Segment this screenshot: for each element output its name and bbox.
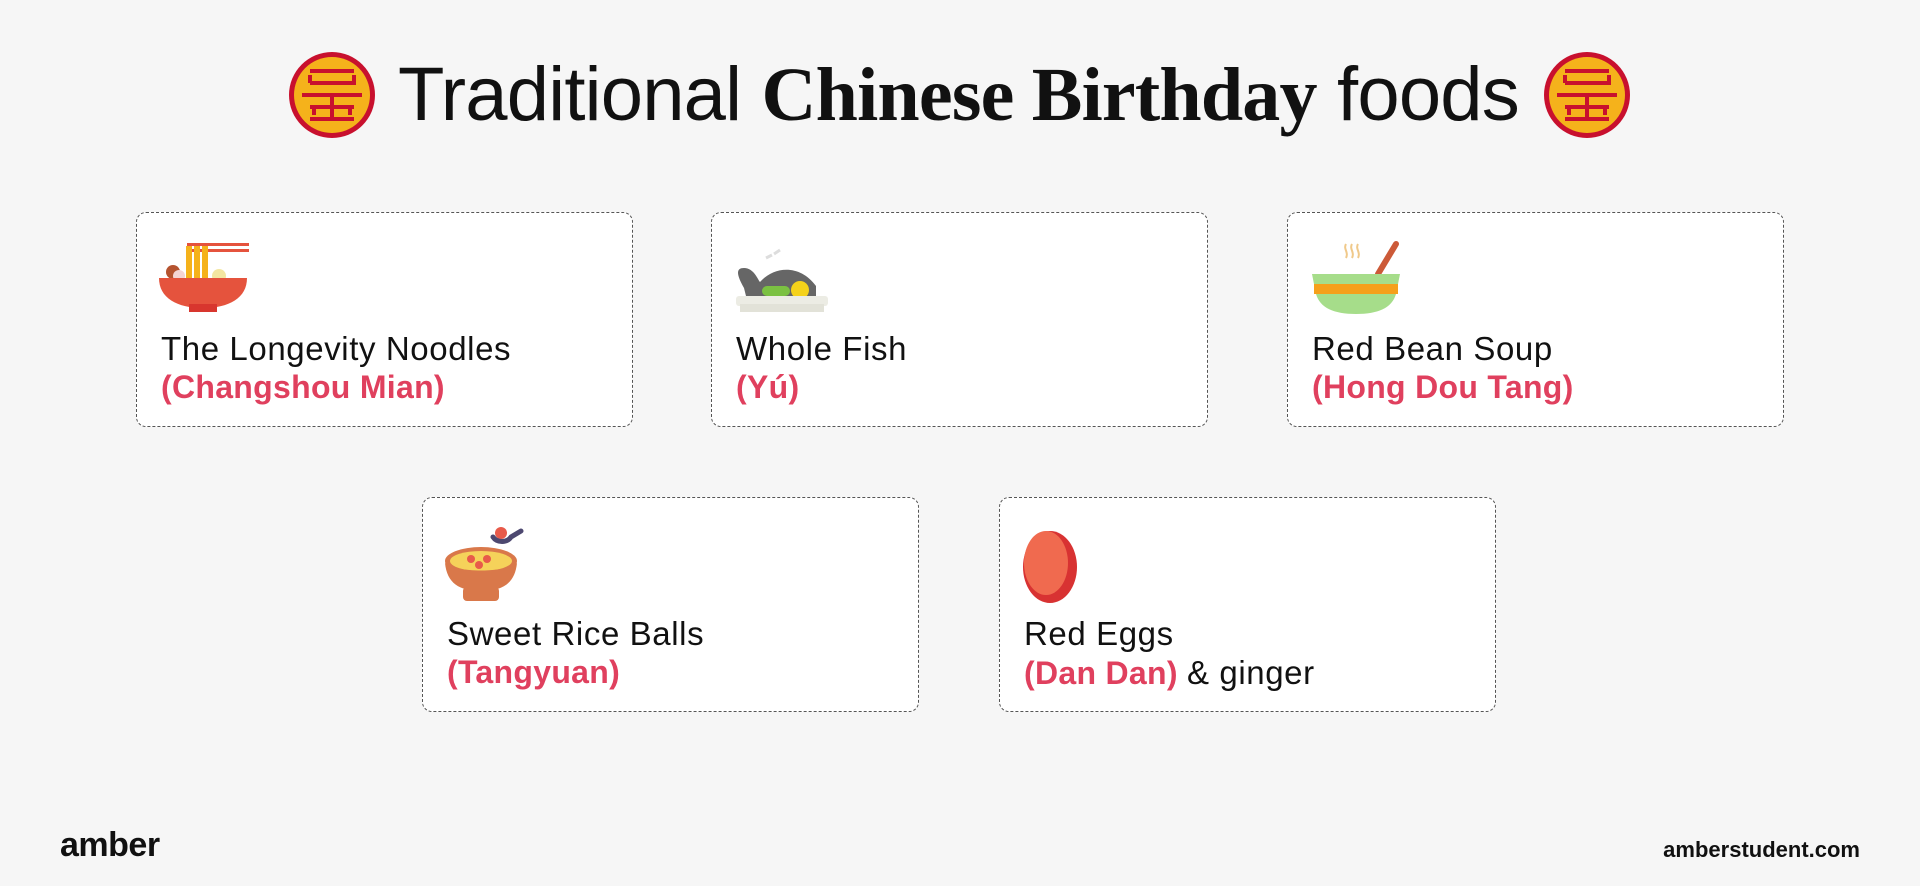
panel: sweet rice balls: (Tangyuan) — [447, 654, 620, 690]
panel: red eggs: Red Eggs — [1024, 615, 1174, 652]
panel: red eggs — [999, 497, 1496, 712]
icon: emblem right — [1544, 52, 1630, 138]
icon: soup bowl — [1312, 241, 1400, 314]
icon: red egg — [1023, 531, 1077, 603]
panel: fish — [711, 212, 1208, 427]
panel: red bean soup — [1287, 212, 1784, 427]
icon: tangyuan bowl — [445, 527, 524, 601]
footer url: amberstudent.com — [1663, 837, 1860, 862]
icon: fish plate — [736, 249, 828, 312]
panel: red bean soup: Red Bean Soup — [1312, 330, 1553, 367]
panel: red eggs: (Dan Dan) & ginger — [1024, 654, 1315, 691]
panel: red bean soup: (Hong Dou Tang) — [1312, 369, 1574, 405]
panel: fish: (Yú) — [736, 369, 799, 405]
panel: noodles — [136, 212, 633, 427]
logo: amber: amber — [60, 826, 160, 864]
icon: noodle bowl — [159, 243, 249, 312]
panel: sweet rice balls: Sweet Rice Balls — [447, 615, 704, 652]
icon: emblem left — [289, 52, 375, 138]
panel: noodles: (Changshou Mian) — [161, 369, 445, 405]
panel: fish: Whole Fish — [736, 330, 907, 367]
panel: noodles: The Longevity Noodles — [161, 330, 511, 367]
panel: sweet rice balls — [422, 497, 919, 712]
title: Traditional Chinese Birthday foods — [398, 52, 1519, 137]
